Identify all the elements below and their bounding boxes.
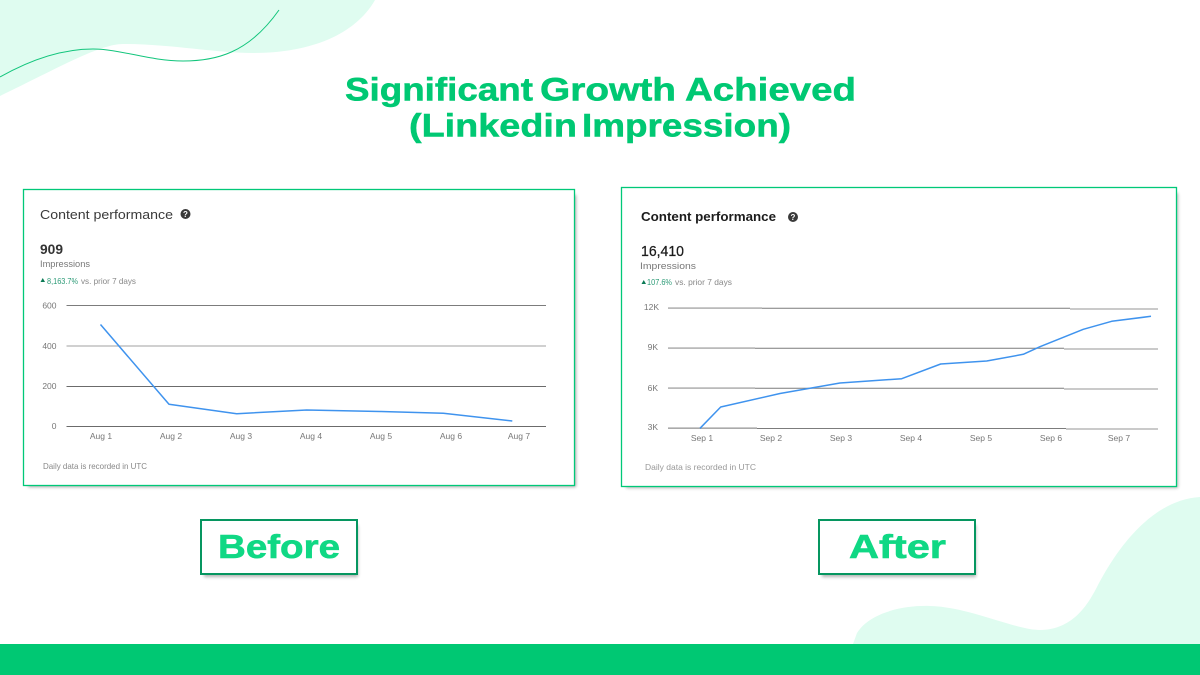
card heading: Content performance (40, 207, 173, 222)
title (345, 72, 856, 144)
badge shadow (822, 525, 976, 577)
line chart: September impressions: Sep 6 (1040, 433, 1062, 443)
line chart: September impressions: Sep 1 (691, 433, 713, 443)
change versus prior period (40, 276, 136, 286)
badge label: Before (218, 528, 340, 565)
badge label: After (849, 528, 946, 565)
card frame (622, 188, 1176, 486)
decorative blob: top left (0, 0, 375, 96)
footnote: Daily data is recorded in UTC (645, 462, 756, 472)
line chart: August impressions: 400 (42, 341, 57, 351)
line chart: August impressions: 0 (52, 421, 57, 431)
line chart: September impressions: Sep 7 (1108, 433, 1130, 443)
line chart: August impressions: 600 (42, 300, 57, 310)
line chart: August impressions: Aug 2 (160, 431, 182, 441)
decorative curve: top left (0, 10, 279, 77)
line chart: September impressions: Sep 2 (760, 433, 782, 443)
title line 1: Growth (540, 72, 676, 108)
title line 1: Significant (345, 72, 533, 108)
line chart: August impressions (42, 300, 546, 441)
line chart: September impressions: 3K (648, 422, 658, 432)
change versus prior period (642, 277, 732, 287)
line chart: September impressions: 9K (648, 342, 658, 352)
card shadow (626, 193, 1178, 488)
impressions label: Impressions (40, 259, 91, 269)
impressions label: Impressions (640, 261, 696, 272)
impressions total: 16,410 (641, 244, 684, 260)
line chart: August impressions: 200 (42, 381, 57, 391)
line chart: August impressions: Aug 4 (300, 431, 322, 441)
line chart: August impressions: Aug 6 (440, 431, 462, 441)
line chart: August impressions: Aug 7 (508, 431, 530, 441)
badge frame (201, 520, 357, 574)
change versus prior period: 107.6% (647, 277, 672, 287)
badge: before (201, 520, 358, 577)
line chart: September impressions: Sep 3 (830, 433, 852, 443)
badge shadow (204, 525, 358, 577)
title line 2: (Linkedin (409, 108, 577, 144)
change versus prior period: vs. prior 7 days (675, 277, 732, 287)
title line 1: Achieved (685, 72, 856, 108)
title line 2: Impression) (582, 108, 791, 144)
icon: help (180, 209, 190, 219)
line chart: August impressions: Aug 1 (90, 431, 112, 441)
panel: before chart card (24, 190, 576, 487)
card shadow (28, 195, 576, 487)
card heading: Content performance (641, 209, 776, 224)
change versus prior period: 8,163.7% (47, 276, 78, 286)
line chart: September impressions: 12K (644, 302, 659, 312)
icon: help (788, 212, 798, 222)
change versus prior period: vs. prior 7 days (81, 276, 136, 286)
badge: after (819, 520, 976, 577)
icon: help: ? (791, 213, 796, 222)
panel: after chart card (622, 188, 1178, 488)
footnote: Daily data is recorded in UTC (43, 461, 147, 471)
line chart: August impressions: Aug 5 (370, 431, 392, 441)
line chart: September impressions: 6K (648, 383, 658, 393)
icon: help: ? (183, 210, 188, 219)
decorative blob: bottom right (853, 497, 1200, 644)
impressions total: 909 (40, 241, 63, 257)
card frame (24, 190, 574, 486)
line chart: August impressions: Aug 3 (230, 431, 252, 441)
badge frame (819, 520, 975, 574)
line chart: September impressions: Sep 4 (900, 433, 922, 443)
line chart: September impressions (644, 302, 1158, 443)
line chart: September impressions: Sep 5 (970, 433, 992, 443)
footer bar (0, 644, 1200, 675)
